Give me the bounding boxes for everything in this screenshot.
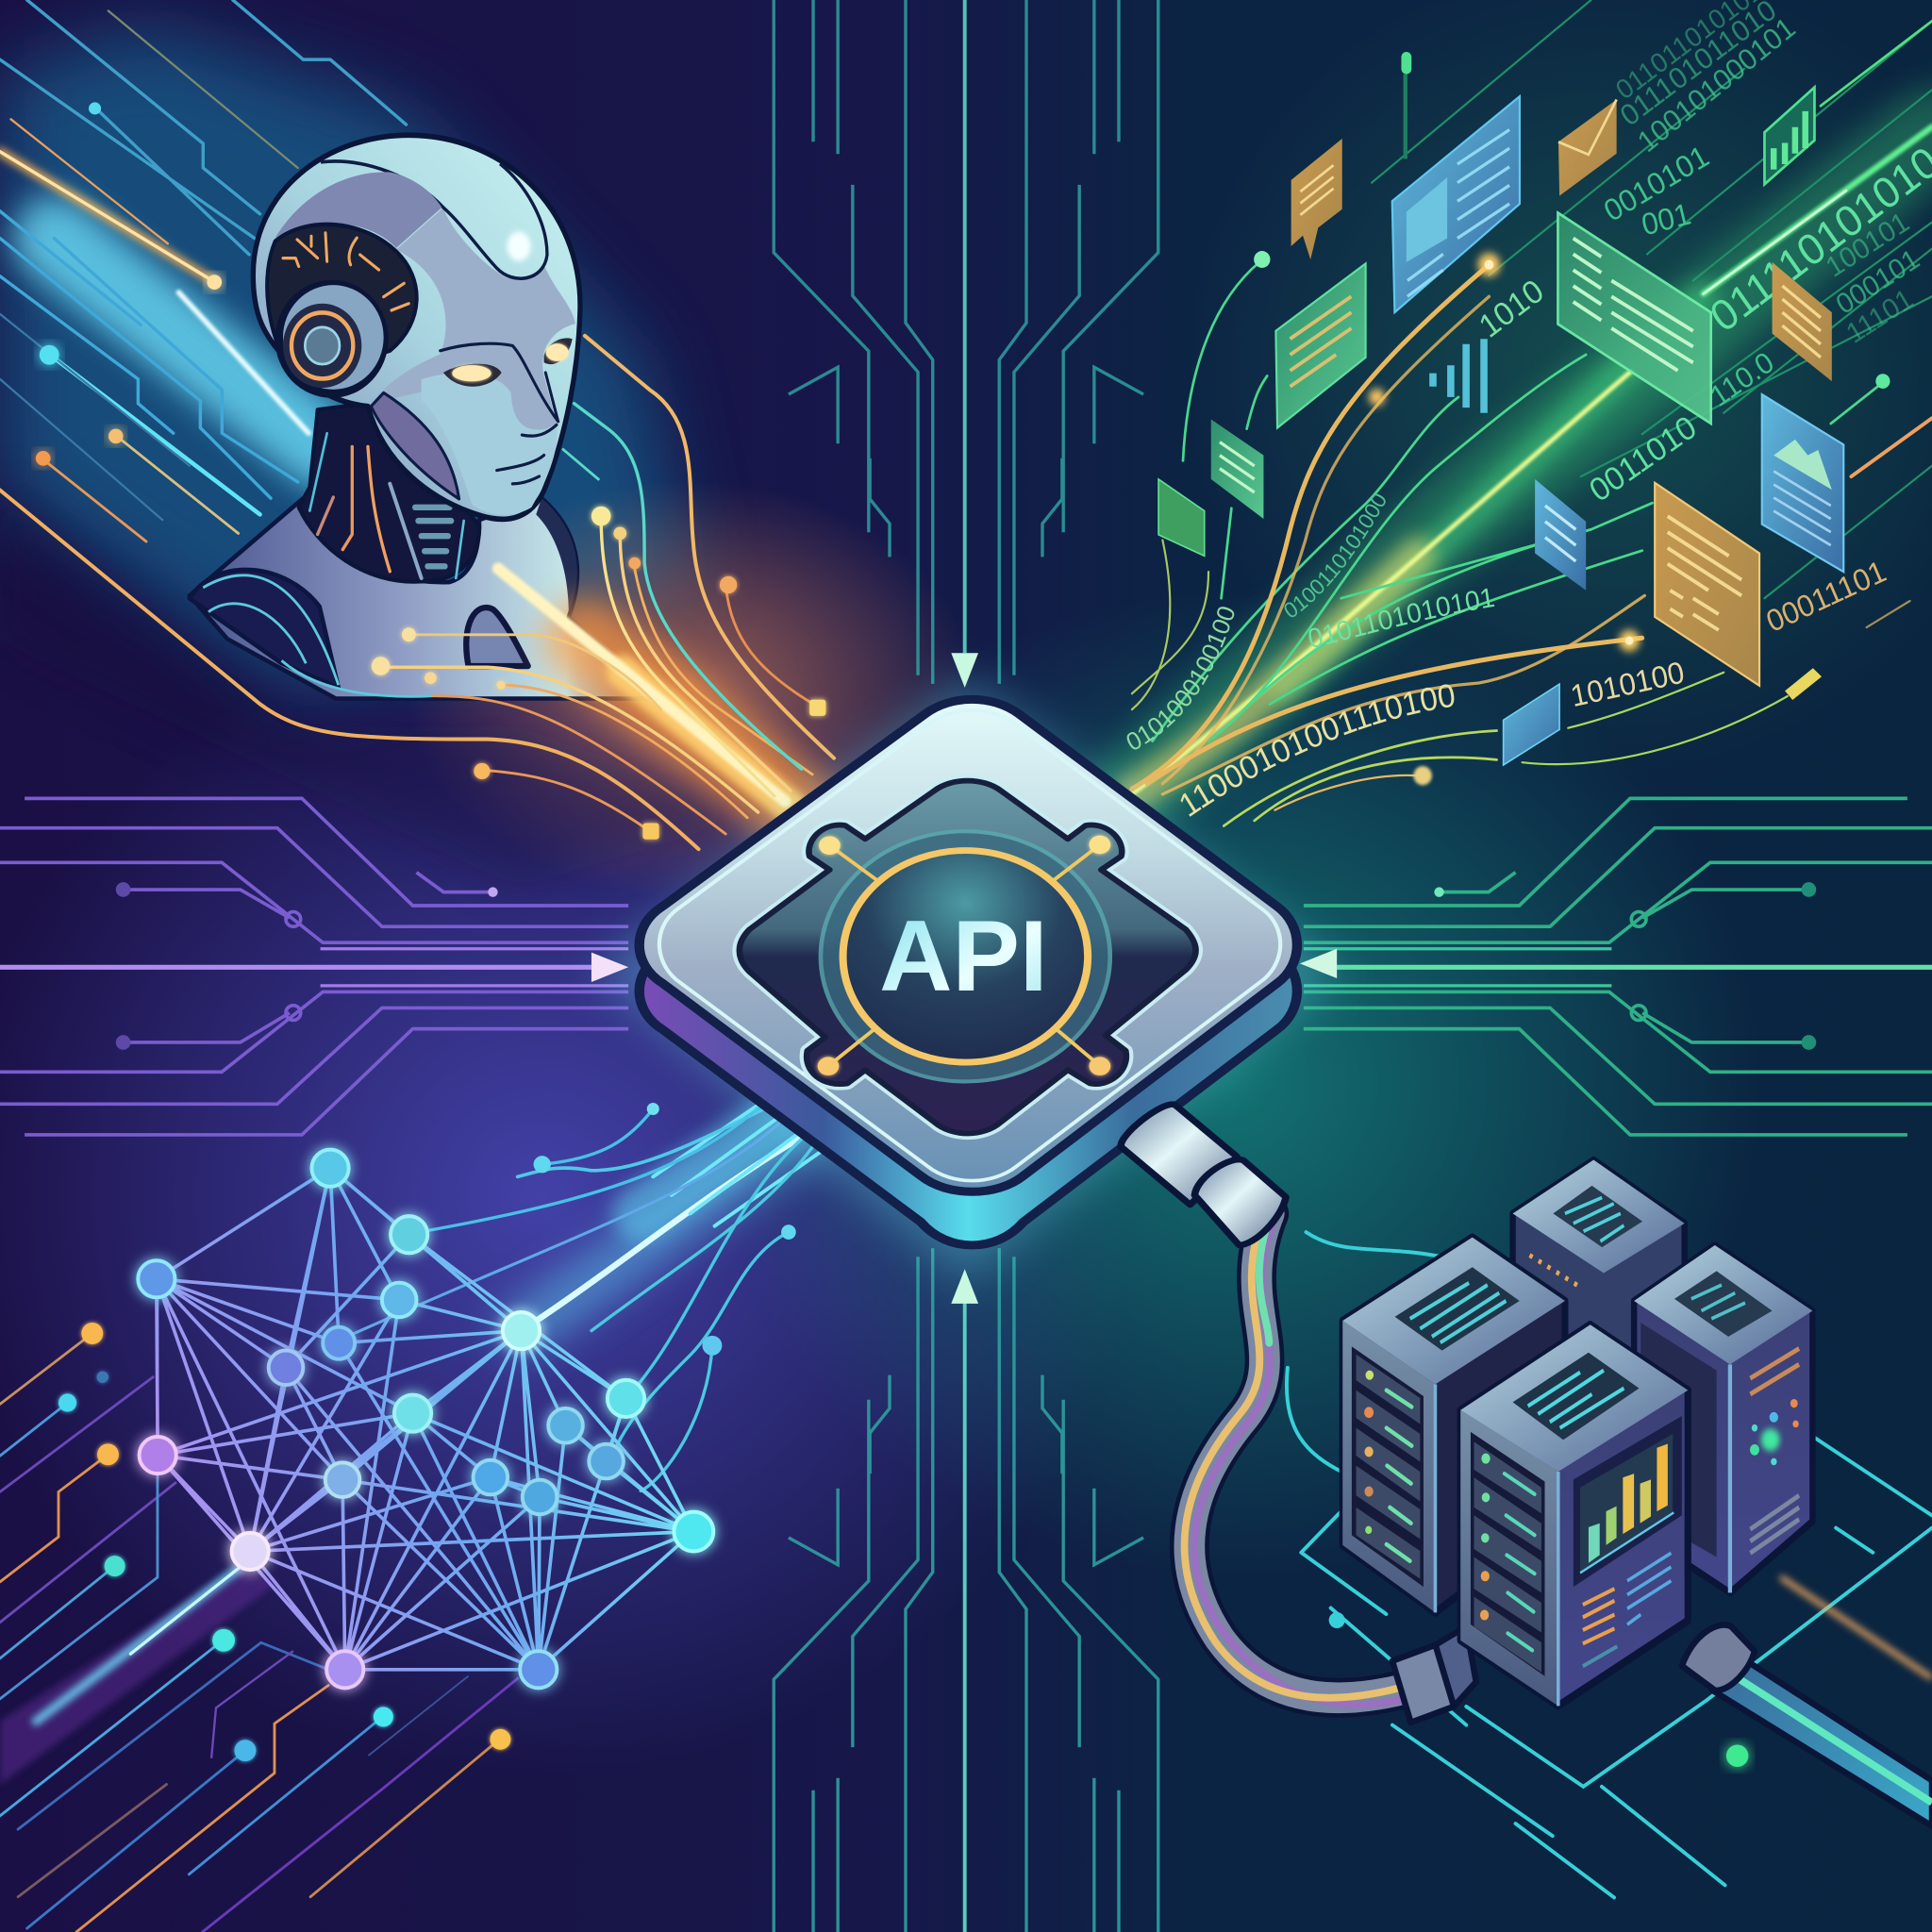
hub glow [690, 752, 1244, 1201]
robot top panel [275, 172, 441, 248]
arrow: left [591, 953, 628, 982]
binary text upper right: 11101 [1841, 283, 1919, 350]
robot head and neck [253, 135, 580, 582]
nodes: upper left [36, 102, 222, 466]
binary text upper right: 110.0 [1704, 345, 1780, 413]
robot brain circuits [283, 233, 408, 310]
circuit board under servers [1287, 1232, 1932, 1897]
doc: large green report [1557, 213, 1711, 424]
hub gold ring and sphere [843, 851, 1088, 1062]
robot neck wiring [309, 433, 464, 578]
arrow: top [951, 653, 978, 688]
binary text upper right: 001 [1638, 196, 1694, 242]
robot brain panel [267, 225, 417, 379]
server rack front [1460, 1324, 1688, 1706]
orange ray lower right [1780, 1577, 1932, 1678]
binary text upper right: 0010101 [1598, 139, 1714, 228]
robot mouth and nose [441, 343, 558, 484]
hub top rim [659, 710, 1280, 1181]
flow lines to neural network [333, 1084, 838, 1491]
robot forehead curve [321, 161, 547, 278]
binary text upper right: 1010 [1473, 273, 1550, 345]
server rack left [1342, 1238, 1565, 1612]
server rack right [1634, 1245, 1812, 1592]
neural network [138, 1150, 713, 1688]
doc: small green [1211, 420, 1263, 519]
server rack back [1342, 1160, 1812, 1706]
cable from hub to servers [1185, 1214, 1417, 1705]
API hub [640, 699, 1297, 1245]
robot head [253, 135, 580, 519]
cable connector at hub [1121, 1105, 1286, 1245]
binary text upper right: 100101000101 [1631, 10, 1802, 158]
robot torso [190, 498, 660, 699]
binary text along lower streams: 00011101 [1761, 554, 1891, 639]
thick data pipe [1682, 1624, 1932, 1826]
robot shoulder arcs [203, 575, 433, 696]
rays and traces: upper left [0, 0, 407, 541]
hub top face [640, 699, 1297, 1191]
stream glow band [1132, 132, 1932, 794]
doc: gold page right [1773, 262, 1832, 381]
arrow: right [1300, 949, 1337, 978]
API label: API [879, 899, 1048, 1012]
binary text along lower streams: 11000101001110100 [1181, 685, 1455, 817]
robot chest slot [466, 608, 528, 666]
blue bars hologram [1433, 339, 1484, 413]
glow rays [1285, 296, 1704, 689]
robot eyes [443, 338, 573, 387]
bright sparks [1254, 52, 1890, 785]
doc: large gold page [1655, 483, 1759, 686]
floating documents [1158, 88, 1843, 765]
network edges [157, 1168, 693, 1670]
doc: gold envelope [1558, 100, 1617, 196]
binary text upper right: 0011010 [1583, 409, 1703, 509]
hub node lights [818, 836, 1110, 1075]
robot head highlight [507, 231, 531, 261]
connector cap [1785, 668, 1822, 700]
network nodes [138, 1150, 713, 1688]
binary text along lower streams: 0101000100100 [1126, 607, 1234, 749]
circuit traces: bottom [774, 1248, 1158, 1932]
hub side thickness [640, 745, 1297, 1245]
doc: green notes [1275, 263, 1366, 427]
doc: tiny green [1158, 479, 1205, 556]
robot face [422, 373, 557, 515]
robot rear neck plate [536, 498, 577, 612]
front server bar chart screen [1574, 1416, 1682, 1587]
doc: blue article [1392, 96, 1520, 312]
binary text along lower streams: 0101101010101 [1308, 589, 1494, 647]
binary text upper right: 100101 [1821, 207, 1915, 284]
binary text along lower streams: 0100110101000 [1285, 494, 1386, 617]
doc: small blue page [1535, 479, 1586, 591]
binary text upper right [1473, 0, 1932, 509]
robot neck [299, 403, 479, 582]
cable connector at server [1392, 1626, 1476, 1723]
robot cheek panel [371, 392, 459, 499]
binary text along lower streams [1083, 402, 1891, 862]
doc: blue chart page [1762, 394, 1843, 572]
arrow: bottom [951, 1269, 978, 1304]
doc: small blue card [1504, 684, 1559, 765]
hub inner opening [740, 781, 1196, 1134]
gold streams [1132, 265, 1932, 826]
binary text along lower streams: 1010100 [1568, 655, 1688, 713]
binary text upper right: 000101 [1831, 243, 1925, 321]
circuit traces: left purple [0, 798, 628, 1135]
data flow streams upper right [1089, 0, 1932, 828]
diagonal tracks [1372, 0, 1932, 598]
robot head side plate [371, 208, 575, 432]
circuit traces: right green [1304, 798, 1932, 1135]
hub connector traces [829, 845, 1099, 1065]
doc: gold chat note [1291, 139, 1342, 259]
rays and nodes: lower left [0, 1280, 518, 1932]
robot shoulder joint [190, 570, 339, 688]
green curves [1153, 262, 1885, 741]
circuit traces: top [774, 0, 1158, 684]
doc: green chart [1764, 88, 1814, 184]
robot flow lines [0, 336, 834, 849]
hub inner opening rim [740, 781, 1196, 1134]
hub teal ring [821, 831, 1110, 1081]
robot ear [275, 280, 389, 398]
